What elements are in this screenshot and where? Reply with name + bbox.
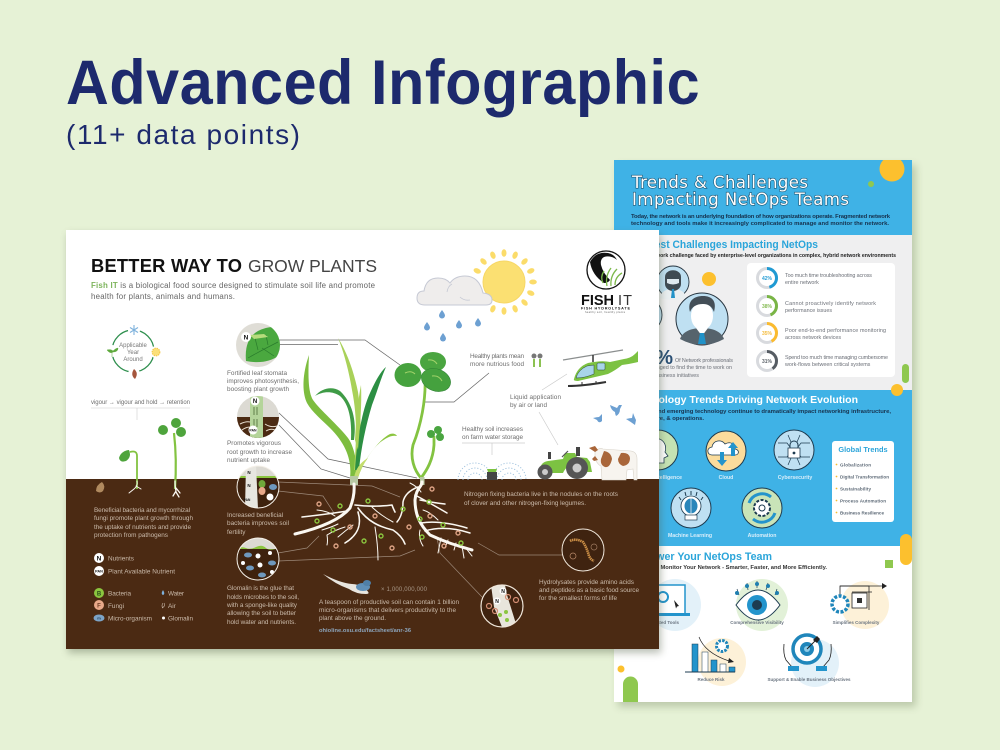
intro text: health for plants, animals and humans. (91, 292, 235, 301)
callout: beneficial bacteria: N (247, 470, 251, 475)
donut 38% (758, 296, 776, 316)
card: challenges donut list: entire network (785, 280, 819, 286)
icon: year round cycle: Applicable (119, 343, 148, 349)
icon: cybersecurity (774, 430, 814, 481)
title: Advanced Infographic (66, 47, 700, 117)
icon: integrated tools: Integrated Tools (644, 620, 679, 625)
callout: beneficial bacteria: Increased beneficial (227, 512, 283, 519)
section: biggest challenges: The top network challenge faced by enterprise-level organizations in complex, hybrid network environments (628, 253, 896, 259)
legend: organisms: m (97, 616, 101, 620)
growth stages caption (91, 400, 190, 420)
text: liquid application: Liquid application (510, 394, 561, 401)
text: beneficial bacteria: protection from pathogens (94, 532, 168, 539)
seed and young roots (96, 481, 180, 497)
panel: better way to grow plants (front sheet) (66, 230, 659, 649)
section: blue header (614, 156, 912, 235)
icon: cybersecurity: Cybersecurity (778, 475, 812, 481)
icon: comprehensive visibility: Comprehensive Visibility (730, 620, 784, 625)
intro text (91, 281, 376, 301)
callout: glomalin: hold water and nutrients. (227, 619, 296, 626)
card: challenges donut list: performance issues (785, 308, 832, 314)
stat: percent of professionals: Of Network professionals (675, 358, 733, 364)
icon: integrated tools (659, 579, 701, 631)
callout: glomalin: with a sponge-like quality (226, 602, 298, 609)
legend: organisms: B (97, 591, 102, 597)
section: biggest challenges (659, 235, 912, 390)
callout: leaf stomata: N (244, 334, 249, 341)
icon: automation: Automation (748, 533, 776, 539)
icon: simplifies complexity (832, 581, 889, 629)
heading (91, 255, 377, 276)
logo: fish it (581, 251, 632, 314)
legend: organisms: Air (168, 603, 177, 610)
seedling: small (119, 450, 137, 489)
icon: automation (742, 488, 782, 539)
soil microbes: bacteria (315, 499, 463, 545)
text: soil water storage (462, 426, 523, 441)
icon: helicopter (563, 350, 638, 386)
section: blue header: Trends & Challenges (631, 173, 808, 192)
infographic canvas (64, 58, 920, 710)
legend: nutrients (94, 553, 175, 576)
icon: simplifies complexity: Simplifies Complexity (833, 620, 880, 625)
decorative pills: right edge (891, 364, 912, 565)
text: beneficial bacteria (94, 507, 193, 539)
text: soil water storage: on farm water storage (462, 434, 523, 441)
callout: beneficial bacteria: PAN (244, 498, 251, 502)
callout: root growth: nutrient uptake (227, 457, 270, 464)
callout: nitrogen fixing bacteria: Nitrogen fixing bacteria live in the nodules on the roots (464, 491, 618, 498)
seedling: large (158, 418, 186, 489)
callout: nodule detail: N (495, 599, 499, 605)
legend: organisms: Fungi (108, 603, 124, 610)
icon: cloud (417, 276, 492, 305)
legend: organisms: Bacteria (108, 590, 131, 598)
subtitle: (11+ data points) (66, 119, 300, 150)
roots: clover (397, 482, 472, 558)
callout: nutritious food: Healthy plants mean (470, 353, 524, 360)
callout: leaf stomata: Fortified leaf stomata (227, 370, 287, 377)
donut 31% (758, 352, 776, 370)
callout: beneficial bacteria: bacteria improves soil (227, 520, 289, 527)
text: soil water storage: Healthy soil increases (462, 426, 523, 433)
section: empower your team: Empower Your NetOps Team (626, 551, 772, 563)
section: empower your team (614, 545, 912, 702)
stat: percent of professionals: business initiatives (654, 373, 699, 379)
card: global trends: Process Automation (840, 498, 886, 504)
donut 35% (758, 324, 776, 342)
heading: GROW PLANTS (248, 256, 377, 276)
icon: business objectives (767, 635, 851, 687)
text: teaspoon of soil: plant above the ground. (319, 615, 386, 622)
roots: grass (295, 484, 405, 560)
panel shadow: front (68, 234, 661, 653)
section: biggest challenges: Biggest Challenges Impacting NetOps (632, 239, 818, 251)
text: liquid application (510, 394, 561, 409)
heading: BETTER WAY TO (91, 255, 242, 276)
text: teaspoon of soil: ohioline.osu.edu/factsheet/anr-36 (319, 628, 411, 634)
callout: glomalin (226, 537, 299, 626)
icon: tractor (538, 447, 592, 480)
icon: business objectives: Support & Enable Business Objectives (767, 677, 851, 682)
text: teaspoon of soil (319, 599, 459, 634)
icon: comprehensive visibility (730, 579, 788, 631)
legend: organisms (94, 588, 193, 622)
legend: organisms: F (97, 603, 101, 609)
callout: beneficial bacteria (227, 465, 289, 536)
section: technology trends: architecture, & operations. (629, 416, 704, 422)
callout: root growth (227, 396, 292, 464)
callout: nitrogen fixing bacteria: of clover and other nitrogen-fixing legumes. (464, 500, 586, 507)
callout: root growth: N (253, 399, 257, 405)
callout: leaf stomata: boosting plant growth (227, 386, 289, 393)
callout: root growth: Promotes vigorous (227, 440, 281, 447)
text: beneficial bacteria: Beneficial bacteria and mycorrhizal (94, 507, 190, 514)
callout: nutritious food (470, 353, 542, 368)
icon: birds (593, 405, 636, 425)
card: global trends: Sustainability (840, 486, 871, 492)
logo: fish it: IT (618, 293, 632, 309)
intro text: Fish IT is a biological food source designed to stimulate soil life and promote (91, 281, 376, 290)
icon: cloud: Cloud (719, 475, 733, 481)
logo: fish it: FISH HYDROLYSATE (581, 306, 630, 310)
icon: cow (589, 446, 637, 480)
callout: root growth: PAN (249, 428, 257, 432)
callout: leaf stomata: improves photosynthesis, (227, 378, 299, 385)
section: technology trends: Technology Trends Driving Network Evolution (628, 394, 858, 406)
text: liquid application: by air or land (510, 402, 547, 409)
legend: organisms: Glomalin (168, 616, 193, 622)
callout: hydrolysates (539, 529, 639, 602)
callout: hydrolysates: and peptides as a basic food source (539, 587, 639, 594)
callout: root growth: root growth to increase (227, 449, 292, 456)
growth stages caption: vigour → vigour and hold → retention (91, 400, 190, 406)
callout: nitrogen fixing bacteria (464, 491, 618, 507)
card: challenges donut list: Poor end-to-end performance monitoring (785, 328, 886, 334)
callout: nutritious food: more nutrious food (470, 361, 524, 368)
card: challenges donut list: across network devices (785, 335, 841, 341)
icon: cloud (706, 431, 746, 481)
card: challenges donut list: Cannot proactively identify network (785, 301, 876, 307)
icon: machine learning: Machine Learning (668, 533, 712, 539)
legend: nutrients: PAN (95, 570, 103, 574)
section: blue header: Today, the network is an underlying foundation of how organizations operate. Fragmented network (631, 214, 891, 220)
callout: glomalin: holds microbes to the soil, (227, 594, 299, 601)
donut 42% (758, 268, 776, 288)
stat: percent of professionals: 38% (633, 347, 673, 369)
callout: hydrolysates: for the smallest forms of life (539, 595, 617, 602)
text: teaspoon of soil: A teaspoon of productive soil can contain 1 billion (319, 599, 459, 606)
leader lines (278, 340, 567, 597)
plant: grass (303, 338, 397, 485)
section: technology trends (659, 390, 912, 545)
icon: person hidden (659, 304, 662, 326)
icon: reduce risk: Reduce Risk (697, 677, 725, 682)
logo: fish it: healthy soil, healthy plants (585, 310, 626, 314)
callout: hydrolysates: Hydrolysates provide amino acids (539, 579, 634, 586)
donut 31%: 31% (762, 359, 773, 365)
icon: year round cycle (106, 324, 162, 380)
callout: nodule detail: N (501, 589, 505, 595)
card: global trends (832, 441, 894, 522)
card: challenges donut list: Too much time troubleshooting across (785, 273, 872, 279)
donut 42%: 42% (762, 276, 773, 282)
panel: NetOps trends and challenges (back sheet) (614, 156, 912, 702)
section: technology trends: New and emerging technology continue to dramatically impact networking infrastructure, (641, 409, 891, 415)
icon: artificial intelligence (659, 430, 682, 480)
icon: machine learning (668, 488, 712, 539)
icon: person large (676, 293, 728, 345)
callout: beneficial bacteria: fertility (227, 529, 246, 536)
callout: glomalin: allowing the soil to better (227, 610, 297, 617)
icon: rain drops (424, 310, 481, 342)
callout: glomalin: Glomalin is the glue that (227, 585, 294, 592)
card: challenges donut list: Spend too much time managing cumbersome (785, 355, 888, 361)
soil microbes: fungi (317, 487, 460, 550)
card: global trends: Business Resilience (840, 510, 884, 516)
text: beneficial bacteria: the uptake of nutrients and provide (94, 524, 191, 531)
card: challenges donut list (747, 263, 895, 377)
icon: artificial intelligence: Artificial Intelligence (631, 475, 682, 481)
panel shadow: back (618, 165, 916, 707)
icon: person small (657, 266, 689, 300)
card: global trends: Global Trends (838, 445, 888, 454)
legend: organisms: Water (168, 590, 185, 598)
section: empower your team: Continuously Monitor Your Network - Smarter, Faster, and More Efficiently. (622, 565, 827, 571)
card: global trends: Digital Transformation (840, 474, 889, 480)
legend: nutrients: Plant Available Nutrient (108, 568, 175, 576)
legend: nutrients: N (97, 555, 102, 562)
section: blue header: Impacting NetOps Teams (632, 190, 849, 209)
card: global trends: Globalization (840, 462, 871, 468)
donut 35%: 35% (762, 331, 773, 337)
donut 38%: 38% (762, 304, 773, 310)
stat: percent of professionals: Challenged to find the time to work on (642, 365, 732, 371)
text: beneficial bacteria: fungi promote plant growth through (94, 515, 193, 522)
icon: sprinkler (458, 463, 526, 480)
legend: organisms: Micro-organism (108, 616, 152, 622)
spoon with microbes (323, 574, 428, 594)
callout: nodule detail (481, 585, 523, 627)
spoon with microbes: × 1,000,000,000 (381, 587, 428, 593)
icon: reduce risk (685, 637, 746, 686)
callout: beneficial bacteria: N (247, 483, 251, 488)
logo: fish it: FISH (581, 293, 614, 309)
plant: clover (394, 352, 454, 485)
text: teaspoon of soil: micro-organisms that delivers productivity to the (319, 607, 456, 614)
callout: leaf stomata (227, 323, 299, 393)
icon: year round cycle: Year (127, 350, 139, 356)
icon: year round cycle: Around (123, 357, 143, 363)
card: challenges donut list: work-flows between critical systems (784, 362, 871, 368)
icon: fork and spoon (532, 354, 542, 367)
section: blue header: technology and tools make it increasingly complicated to manage and monitor the network. (631, 221, 889, 227)
legend: nutrients: Nutrients (108, 556, 134, 562)
icon: sun (473, 249, 537, 315)
stat: percent of professionals (659, 350, 733, 377)
